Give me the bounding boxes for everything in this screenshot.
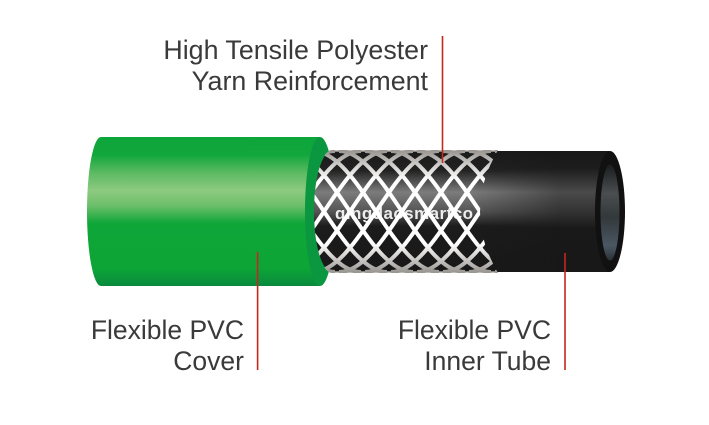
black inner tube: [314, 151, 625, 272]
leader line: cover: [257, 252, 258, 370]
heading label: yarn reinforcement: High Tensile Polyester: [163, 35, 428, 65]
green PVC cover: [87, 137, 335, 286]
heading label: yarn reinforcement: Yarn Reinforcement: [192, 66, 429, 96]
leader line: inner tube: [564, 253, 566, 370]
heading label: yarn reinforcement: [163, 35, 429, 96]
label: inner tube: Flexible PVC: [398, 315, 551, 345]
label: inner tube: [398, 315, 551, 376]
polyester yarn braid: [314, 150, 498, 273]
watermark: qingdaosmartco: [335, 204, 473, 223]
label: cover: [91, 315, 244, 376]
label: cover: Flexible PVC: [91, 315, 244, 345]
tube end opening: [595, 151, 625, 272]
label: inner tube: Inner Tube: [424, 346, 551, 376]
label: cover: Cover: [173, 346, 244, 376]
leader line: yarn: [442, 36, 443, 163]
